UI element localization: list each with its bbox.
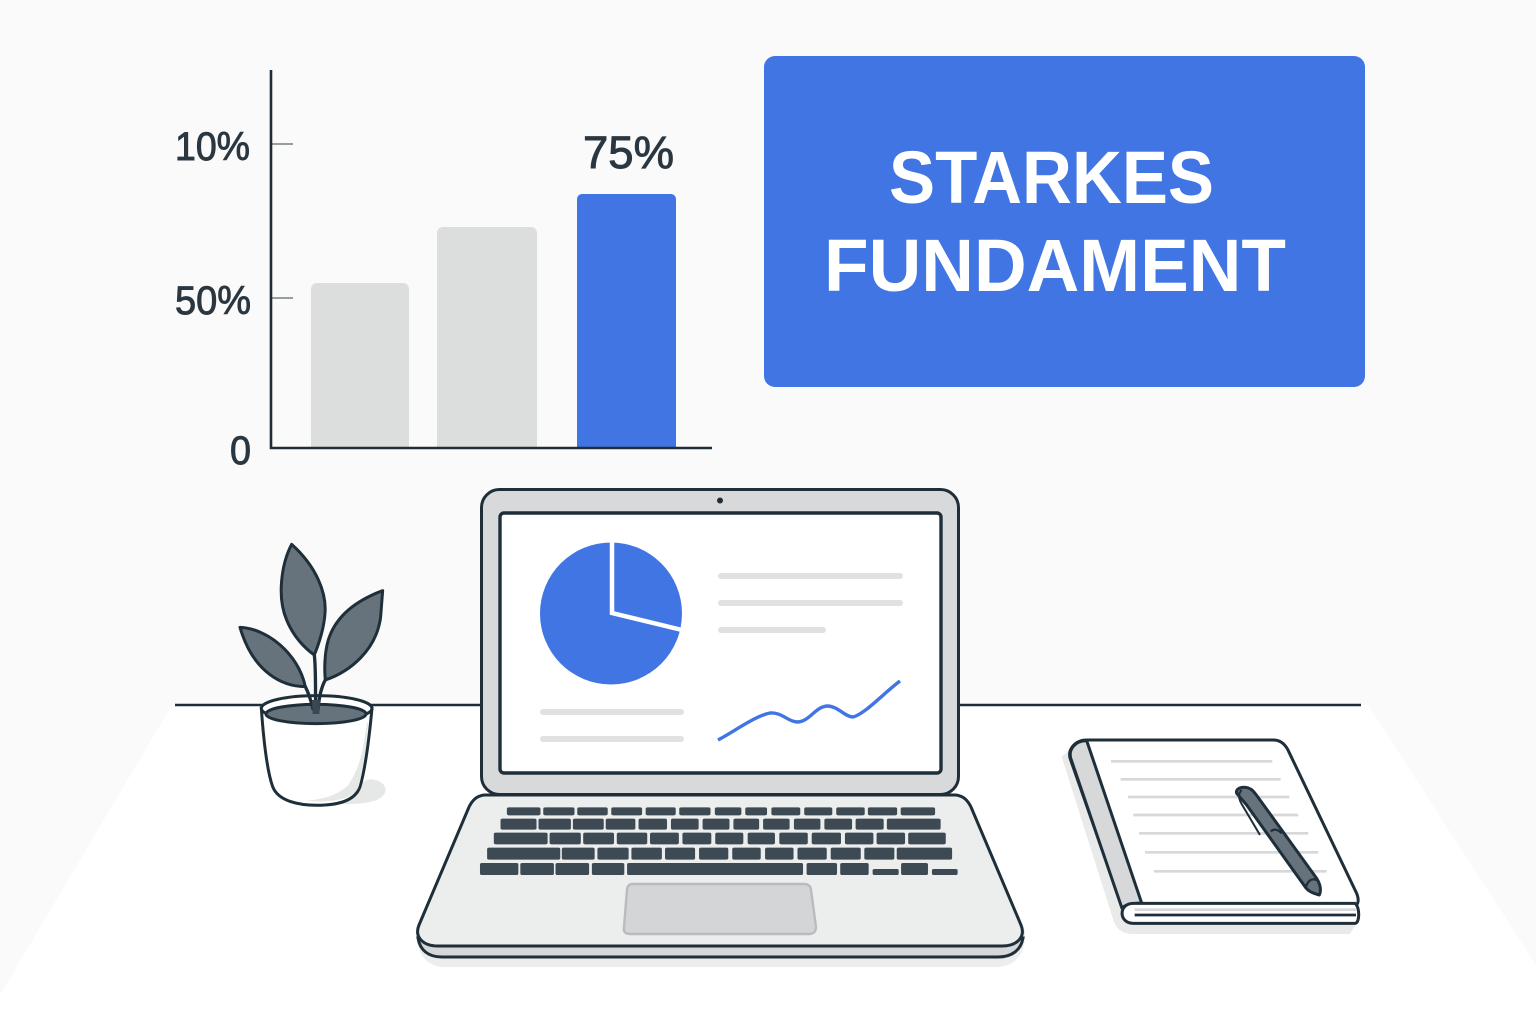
laptop shadow <box>416 930 1025 967</box>
axis label 10%: 10% <box>175 125 250 169</box>
chart axes <box>271 70 712 448</box>
notebook bottom edge <box>1122 903 1359 923</box>
notebook with pen <box>1062 740 1359 934</box>
banner text line 1: STARKES <box>889 136 1214 219</box>
banner text line 2: FUNDAMENT <box>824 224 1286 307</box>
plant in pot <box>240 544 386 805</box>
page edge lines <box>1135 906 1356 914</box>
leaf: centre <box>281 544 325 655</box>
laptop base <box>418 795 1023 957</box>
laptop lid <box>482 490 958 794</box>
notebook spine <box>1070 741 1142 908</box>
base lower lip <box>418 938 1023 957</box>
laptop screen <box>500 513 941 773</box>
axis ticks <box>271 144 293 298</box>
pot inner shade <box>307 722 368 801</box>
pen clip <box>1239 790 1260 835</box>
pot rim <box>261 696 372 721</box>
banner: Starkes Fundament <box>764 56 1365 387</box>
camera <box>717 498 723 504</box>
stems <box>305 655 325 714</box>
axis label 50%: 50% <box>175 279 251 323</box>
writing lines <box>1111 761 1327 871</box>
text placeholder lines <box>540 573 903 742</box>
desk back edge <box>175 704 1361 706</box>
trackpad <box>624 884 816 934</box>
pen body <box>1236 787 1321 895</box>
bar: first grey <box>311 283 409 447</box>
value label 75%: 75% <box>583 127 674 178</box>
pie chart <box>540 541 682 684</box>
pen grip ring <box>1271 830 1317 887</box>
leaf: right <box>325 591 383 680</box>
pot body <box>261 708 372 805</box>
desk surface <box>0 705 1536 1024</box>
pot shadow <box>320 779 386 804</box>
leaf: left <box>240 627 305 687</box>
bar: highlighted blue <box>577 194 676 447</box>
notebook page <box>1070 740 1358 908</box>
keyboard <box>480 807 958 875</box>
soil <box>266 704 366 724</box>
laptop <box>416 490 1025 967</box>
bar chart <box>175 70 712 473</box>
bar: second grey <box>437 227 537 447</box>
pen <box>1236 787 1321 895</box>
axis label 0: 0 <box>230 429 251 473</box>
line chart <box>718 681 900 740</box>
notebook shadow <box>1062 750 1358 934</box>
base deck <box>418 795 1022 946</box>
